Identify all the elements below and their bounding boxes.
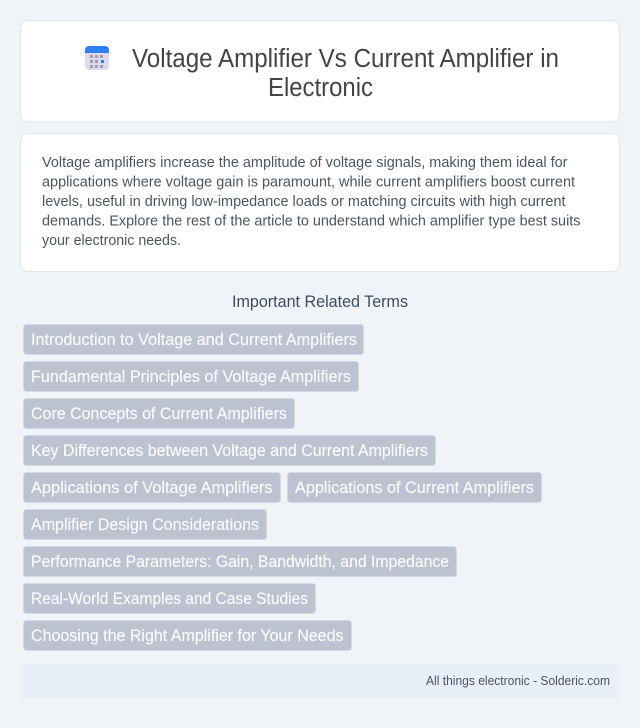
tag: performance parameters: Performance Parameters: Gain, Bandwidth, and Impedance <box>31 553 449 571</box>
tag: introduction <box>24 324 364 354</box>
heading: important related terms: Important Related Terms <box>232 293 408 311</box>
description text: Voltage amplifiers increase the amplitude of voltage signals, making them ideal for <box>42 154 568 171</box>
tag: applications of voltage amplifiers: Applications of Voltage Amplifiers <box>31 479 272 497</box>
tag: applications of current amplifiers: Applications of Current Amplifiers <box>295 479 534 497</box>
footer: All things electronic - Solderic.com <box>426 674 610 688</box>
tag: fundamental principles: Fundamental Principles of Voltage Amplifiers <box>31 368 351 386</box>
description text: demands. Explore the rest of the article to understand which amplifier type best suits <box>42 212 580 230</box>
tag: performance parameters <box>24 546 456 576</box>
tag: key differences <box>24 436 436 466</box>
tag: real-world examples <box>24 584 316 614</box>
tag: choosing the right amplifier <box>24 620 352 650</box>
tag: key differences: Key Differences between Voltage and Current Amplifiers <box>31 442 428 460</box>
title <box>132 45 559 102</box>
title: Voltage Amplifier Vs Current Amplifier in <box>132 45 559 73</box>
tag: amplifier design <box>24 510 266 540</box>
tag: introduction: Introduction to Voltage and Current Amplifiers <box>31 331 357 349</box>
tag: applications of current amplifiers <box>288 472 542 502</box>
tag: choosing the right amplifier: Choosing the Right Amplifier for Your Needs <box>31 627 344 645</box>
tag: core concepts: Core Concepts of Current Amplifiers <box>31 405 287 423</box>
description text: your electronic needs. <box>42 232 181 249</box>
icon: calendar grid <box>85 46 109 70</box>
footer <box>20 664 620 698</box>
tag: real-world examples: Real-World Examples and Case Studies <box>31 590 308 608</box>
tag: core concepts <box>24 398 294 428</box>
tag: fundamental principles <box>24 362 358 392</box>
title: Electronic <box>268 74 373 102</box>
description text: applications where voltage gain is paramount, while current amplifiers boost current <box>42 174 576 190</box>
tag: amplifier design: Amplifier Design Considerations <box>31 516 259 534</box>
tag: applications of voltage amplifiers <box>24 472 280 502</box>
description text: levels, useful in driving low-impedance loads or matching circuits with high current <box>42 193 566 210</box>
description text <box>42 154 580 249</box>
tag list <box>24 324 542 650</box>
panel: title card <box>20 20 620 122</box>
panel: description card <box>20 134 620 272</box>
